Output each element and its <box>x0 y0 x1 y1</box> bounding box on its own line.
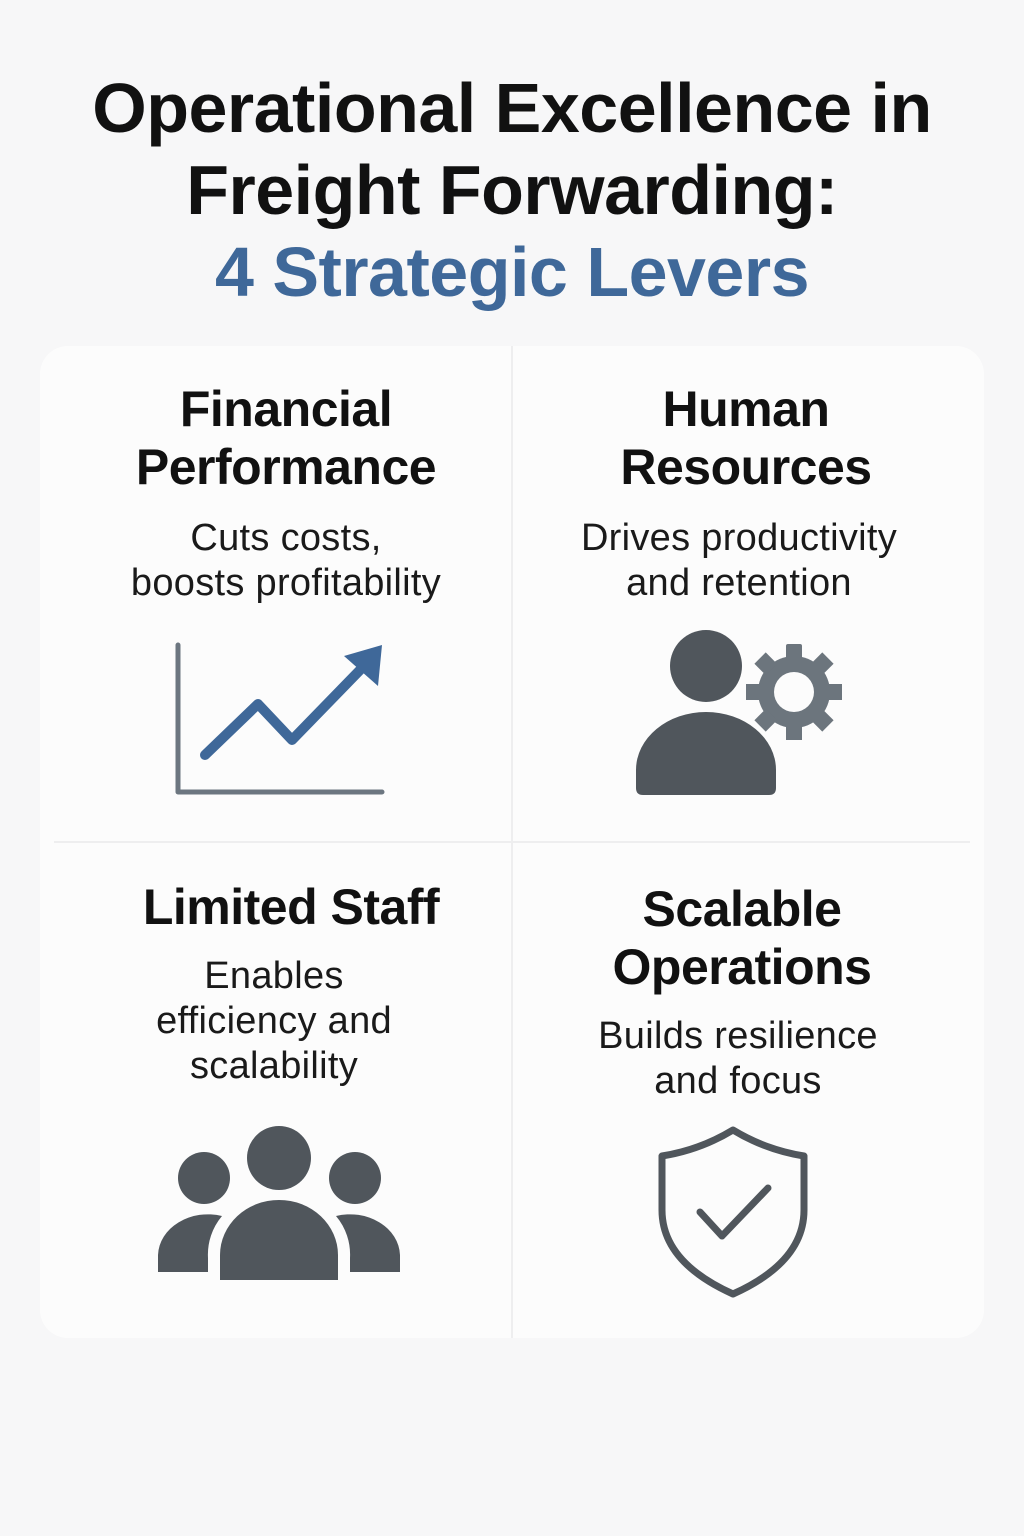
heading: Scalable <box>643 881 841 937</box>
icon: person with gear <box>636 630 842 795</box>
description: Drives productivity <box>581 517 897 559</box>
description: Builds resilience <box>598 1015 878 1057</box>
description: boosts profitability <box>131 562 441 604</box>
heading <box>613 881 871 995</box>
heading: Resources <box>620 439 872 495</box>
description: and focus <box>654 1060 822 1102</box>
icon: group of people <box>158 1126 400 1280</box>
heading: Performance <box>136 439 436 495</box>
description: efficiency and <box>156 1000 392 1042</box>
panel: human resources <box>581 381 897 604</box>
heading: Financial <box>180 381 392 437</box>
heading: Limited Staff <box>143 879 439 935</box>
description: Enables <box>204 955 344 997</box>
title <box>92 69 932 311</box>
panel: limited staff <box>143 879 440 1087</box>
heading <box>136 381 436 495</box>
description <box>131 517 441 604</box>
title: Freight Forwarding: <box>186 151 838 229</box>
icon: growth chart <box>178 645 382 792</box>
icon: shield with check <box>662 1130 804 1294</box>
heading: Operations <box>613 939 871 995</box>
description <box>598 1015 878 1102</box>
title: 4 Strategic Levers <box>215 233 809 311</box>
heading <box>620 381 872 495</box>
description: Cuts costs, <box>190 517 382 559</box>
panel: scalable operations <box>598 881 878 1102</box>
title: Operational Excellence in <box>92 69 932 147</box>
heading: Human <box>663 381 829 437</box>
card grid <box>40 346 984 1338</box>
description <box>581 517 897 604</box>
description: and retention <box>626 562 852 604</box>
description: scalability <box>190 1045 358 1087</box>
panel: financial performance <box>131 381 441 604</box>
description <box>156 955 392 1087</box>
